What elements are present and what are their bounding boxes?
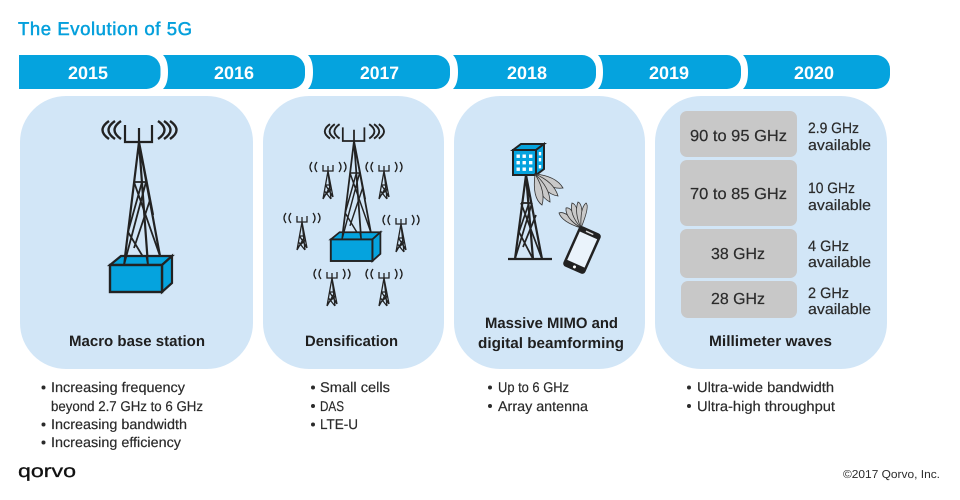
panel heading: millimeter waves: Millimeter waves [709, 333, 832, 350]
band: 70 to 85 GHz [680, 160, 797, 226]
bullets: macro base station: beyond 2.7 GHz to 6 GHz [51, 398, 203, 414]
icons: small cell towers [284, 162, 419, 306]
icon: beam lobes to phone [559, 202, 587, 228]
band: 38 GHz [680, 229, 797, 278]
panel: massive MIMO [454, 96, 645, 369]
bullets: millimeter waves: Ultra-wide bandwidth [697, 379, 834, 395]
year labels: 2019 [649, 63, 689, 83]
availability: 2.9 GHz: 2.9 GHz [808, 120, 859, 137]
availability: 4 GHz [808, 238, 871, 271]
availability: 2 GHz [808, 285, 871, 318]
bullets: millimeter waves: Ultra-high throughput [697, 398, 835, 414]
copyright: ©2017 Qorvo, Inc. [843, 469, 940, 481]
band: 38 GHz: 38 GHz [711, 246, 765, 263]
band: 90 to 95 GHz [680, 111, 797, 157]
availability: 10 GHz: available [808, 197, 871, 214]
availability: 4 GHz: 4 GHz [808, 238, 849, 255]
bullets: massive MIMO: Up to 6 GHz [498, 379, 569, 395]
icon: central tower [325, 124, 384, 261]
availability: 2 GHz: available [808, 301, 871, 318]
year labels [68, 63, 834, 83]
availability: 2.9 GHz: available [808, 137, 871, 154]
icon: antenna array tower [508, 144, 552, 259]
year labels: 2020 [794, 63, 834, 83]
availability: 10 GHz: 10 GHz [808, 180, 855, 197]
logo: Qorvo: qorvo [18, 461, 76, 481]
availability: 4 GHz: available [808, 254, 871, 271]
panel heading: macro: Macro base station [69, 333, 205, 350]
bullets: macro base station [42, 379, 203, 450]
band: 90 to 95 GHz: 90 to 95 GHz [690, 128, 787, 145]
bullets: millimeter waves [687, 379, 835, 414]
availability: 10 GHz [808, 180, 871, 214]
availability: 2 GHz: 2 GHz [808, 285, 849, 302]
year labels: 2017 [360, 63, 399, 83]
bullets: massive MIMO [488, 379, 588, 414]
panel: densification [263, 96, 444, 369]
bullets: densification [311, 379, 390, 432]
year labels: 2016 [214, 63, 254, 83]
panel: macro base station [20, 96, 253, 369]
band: 28 GHz [681, 281, 797, 318]
icon: macro tower with base station [102, 121, 176, 292]
panel heading: densification: Densification [305, 333, 398, 350]
bullets: macro base station: Increasing efficiency [51, 434, 181, 450]
bullets: massive MIMO: Array antenna [498, 398, 588, 414]
panel heading: massive MIMO: Massive MIMO and [485, 315, 618, 332]
panel heading: digital beamforming: digital beamforming [478, 335, 624, 352]
bullets: densification: DAS [320, 398, 344, 414]
availability: 2.9 GHz [808, 120, 871, 154]
band: 28 GHz: 28 GHz [711, 291, 765, 308]
band: 70 to 85 GHz: 70 to 85 GHz [690, 186, 787, 203]
year labels: 2018 [507, 63, 547, 83]
icon: smartphone [562, 225, 602, 275]
panel: millimeter waves [655, 96, 887, 369]
icon: beam lobes from array [534, 174, 563, 205]
year labels: 2015 [68, 63, 108, 83]
bullets: densification: Small cells [320, 379, 390, 395]
timeline bar [19, 55, 890, 89]
title: The Evolution of 5G [18, 18, 192, 39]
bullets: densification: LTE-U [320, 416, 358, 432]
bullets: macro base station: Increasing bandwidth [51, 416, 187, 432]
bullets: macro base station: Increasing frequency [51, 379, 185, 395]
